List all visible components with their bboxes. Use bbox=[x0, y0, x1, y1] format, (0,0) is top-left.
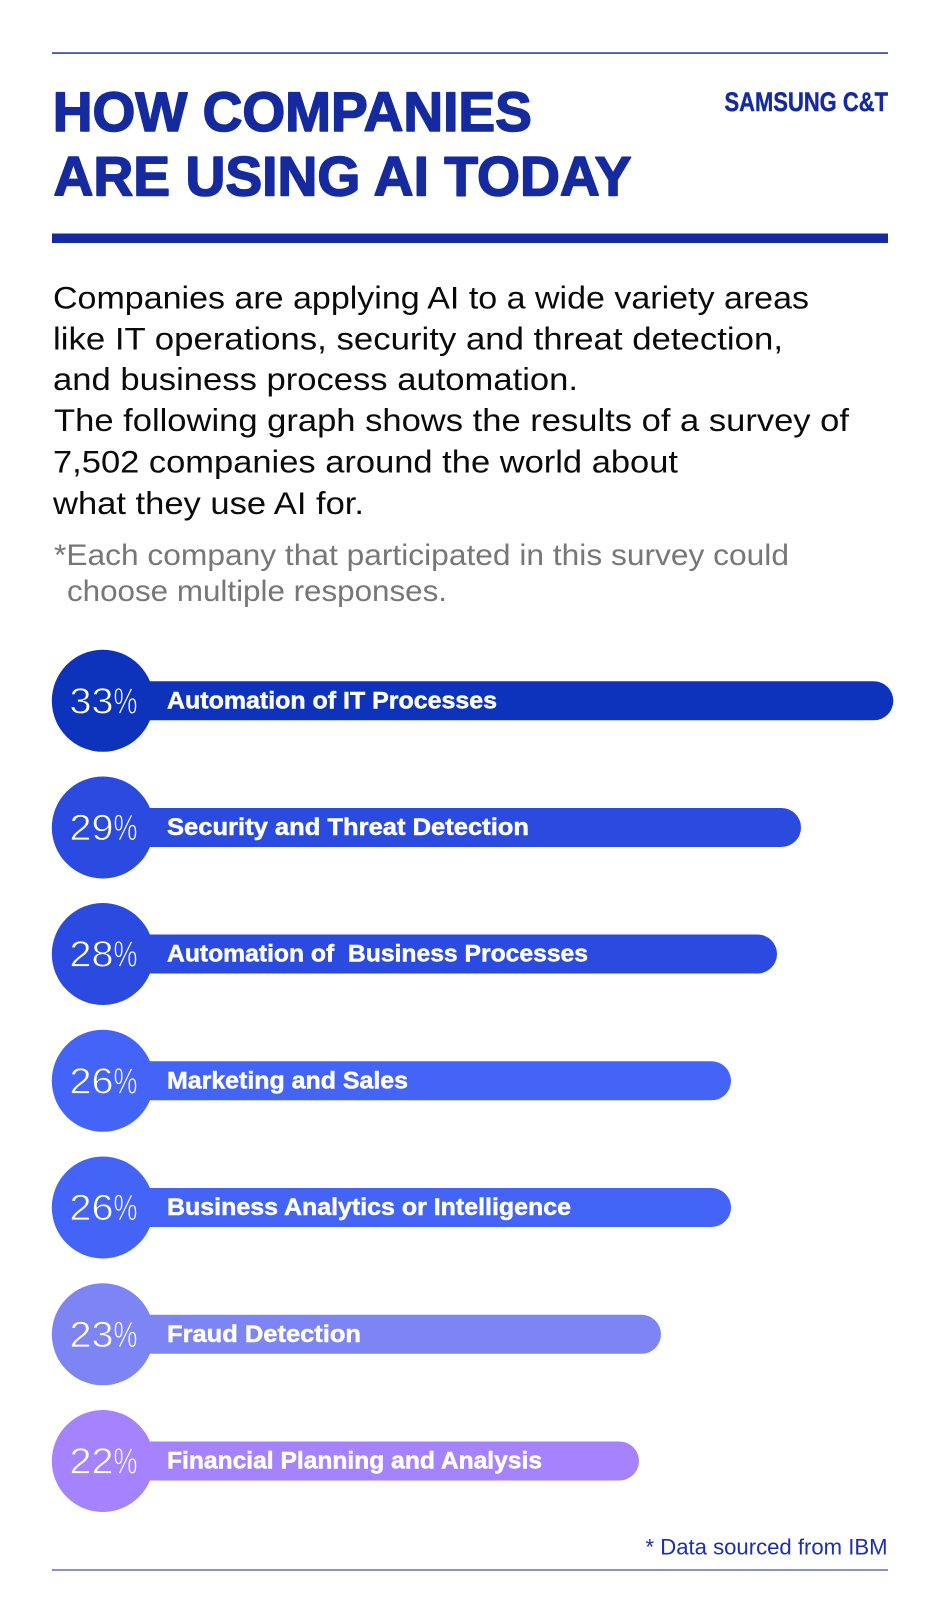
bar: Security and Threat Detection 29%: 29 bbox=[70, 807, 114, 848]
intro paragraph: what they use AI for. bbox=[52, 485, 364, 521]
bar: Automation of Business Processes 28% bbox=[52, 903, 777, 1005]
survey note: *Each company that participated in this survey could bbox=[54, 539, 789, 572]
bar: Fraud Detection 23% bbox=[52, 1283, 661, 1385]
bar: Marketing and Sales 26%: % bbox=[114, 1060, 138, 1102]
intro paragraph: Companies are applying AI to a wide variety areas bbox=[53, 279, 809, 315]
intro paragraph: The following graph shows the results of a survey of bbox=[54, 402, 849, 438]
bar: Fraud Detection 23%: 23 bbox=[70, 1314, 114, 1355]
bar: Marketing and Sales 26%: Marketing and Sales bbox=[167, 1068, 408, 1094]
bar: Automation of IT Processes 33% bbox=[52, 650, 893, 752]
title: ARE USING AI TODAY bbox=[54, 144, 632, 207]
bar: Business Analytics or Intelligence 26% bbox=[52, 1156, 731, 1258]
bar: Automation of IT Processes 33%: Automation of IT Processes bbox=[167, 688, 497, 714]
bar: Marketing and Sales 26% bbox=[52, 1030, 731, 1132]
bar: Financial Planning and Analysis 22%: Financial Planning and Analysis bbox=[167, 1448, 542, 1475]
intro paragraph: 7,502 companies around the world about bbox=[53, 444, 678, 480]
bar: Automation of Business Processes 28%: 28 bbox=[70, 934, 114, 975]
intro paragraph: like IT operations, security and threat detection, bbox=[53, 320, 783, 356]
source note: * Data sourced from IBM bbox=[646, 1534, 888, 1559]
bar: Security and Threat Detection 29%: % bbox=[114, 807, 138, 848]
bar: Business Analytics or Intelligence 26%: Business Analytics or Intelligence bbox=[167, 1194, 571, 1221]
survey note bbox=[54, 539, 789, 608]
title: HOW COMPANIES bbox=[53, 80, 532, 143]
bar: Security and Threat Detection 29% bbox=[52, 776, 801, 878]
logo: Samsung C&T: SAMSUNG C&T bbox=[724, 87, 888, 117]
bar: Financial Planning and Analysis 22%: % bbox=[114, 1441, 138, 1482]
bar: Financial Planning and Analysis 22% bbox=[52, 1410, 639, 1512]
bar: Business Analytics or Intelligence 26%: 26 bbox=[70, 1187, 114, 1228]
intro paragraph bbox=[52, 279, 849, 521]
bar: Automation of Business Processes 28%: Automation of Business Processes bbox=[167, 941, 588, 968]
bar: Fraud Detection 23%: Fraud Detection bbox=[167, 1321, 361, 1348]
bar: Security and Threat Detection 29%: Security and Threat Detection bbox=[167, 814, 529, 841]
bar: Automation of IT Processes 33%: 33 bbox=[70, 680, 114, 722]
bar: Fraud Detection 23%: % bbox=[114, 1314, 138, 1355]
bar: Automation of IT Processes 33%: % bbox=[114, 680, 138, 722]
bar: Financial Planning and Analysis 22%: 22 bbox=[70, 1441, 114, 1482]
bar chart bbox=[52, 650, 893, 1512]
title bbox=[53, 80, 632, 207]
bar: Business Analytics or Intelligence 26%: % bbox=[114, 1187, 138, 1228]
bar: Automation of Business Processes 28%: % bbox=[114, 934, 138, 975]
intro paragraph: and business process automation. bbox=[53, 361, 578, 397]
bar: Marketing and Sales 26%: 26 bbox=[70, 1060, 114, 1102]
survey note: choose multiple responses. bbox=[67, 575, 447, 608]
